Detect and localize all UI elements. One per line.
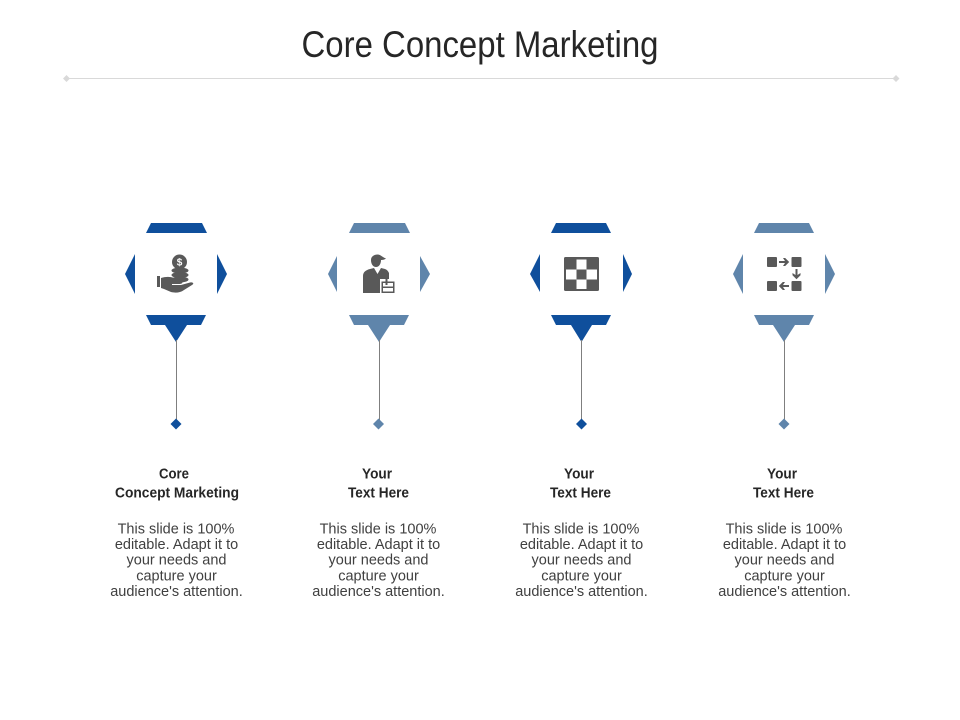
icon: coins in hand: $ [177,258,183,268]
column 1 body text: audience's attention. [110,584,243,600]
column 2 heading: Your [362,466,392,482]
column 4 body text: editable. Adapt it to [723,537,846,553]
column 3 body text: audience's attention. [515,584,648,600]
column 3 body text: capture your [541,568,622,584]
panel: column 1 marker [125,223,227,430]
column 1 heading [115,466,239,502]
column 4 body text: This slide is 100% [726,522,843,538]
column 3 body text: editable. Adapt it to [520,537,643,553]
column 3 heading: Your [564,466,594,482]
column 3 heading: Text Here [550,486,611,502]
column 4 body text: your needs and [735,552,834,568]
title divider [63,75,900,82]
column 2 body text: audience's attention. [312,584,445,600]
column 2 body text: editable. Adapt it to [317,537,440,553]
icon: businessman with briefcase [363,254,396,294]
column 4 body text: audience's attention. [718,584,851,600]
icon: checker square [564,257,599,291]
column 2 body text: This slide is 100% [320,522,437,538]
column 2 body text: capture your [338,568,419,584]
column 4 heading [753,466,814,502]
column 2 body text: your needs and [329,552,428,568]
column 3 body text: your needs and [532,552,631,568]
column 3 body text: This slide is 100% [523,522,640,538]
column 1 heading: Concept Marketing [115,486,239,502]
panel: column 3 marker [530,223,632,430]
icon: process flow squares [767,257,802,291]
column 2 heading: Text Here [348,486,409,502]
icon: coins in hand [157,254,193,293]
column 1 body text: editable. Adapt it to [115,537,238,553]
column 4 heading: Your [767,466,797,482]
column 1 body text: This slide is 100% [118,522,235,538]
panel: column 2 marker [328,223,430,430]
column 1 heading: Core [159,466,189,482]
column 4 body text: capture your [744,568,825,584]
panel: column 4 marker [733,223,835,430]
column 1 body text: capture your [136,568,217,584]
title: Core Concept Marketing [302,24,658,65]
column 1 body text: your needs and [127,552,226,568]
column 4 heading: Text Here [753,486,814,502]
column 2 heading [348,466,409,502]
column 3 heading [550,466,611,502]
